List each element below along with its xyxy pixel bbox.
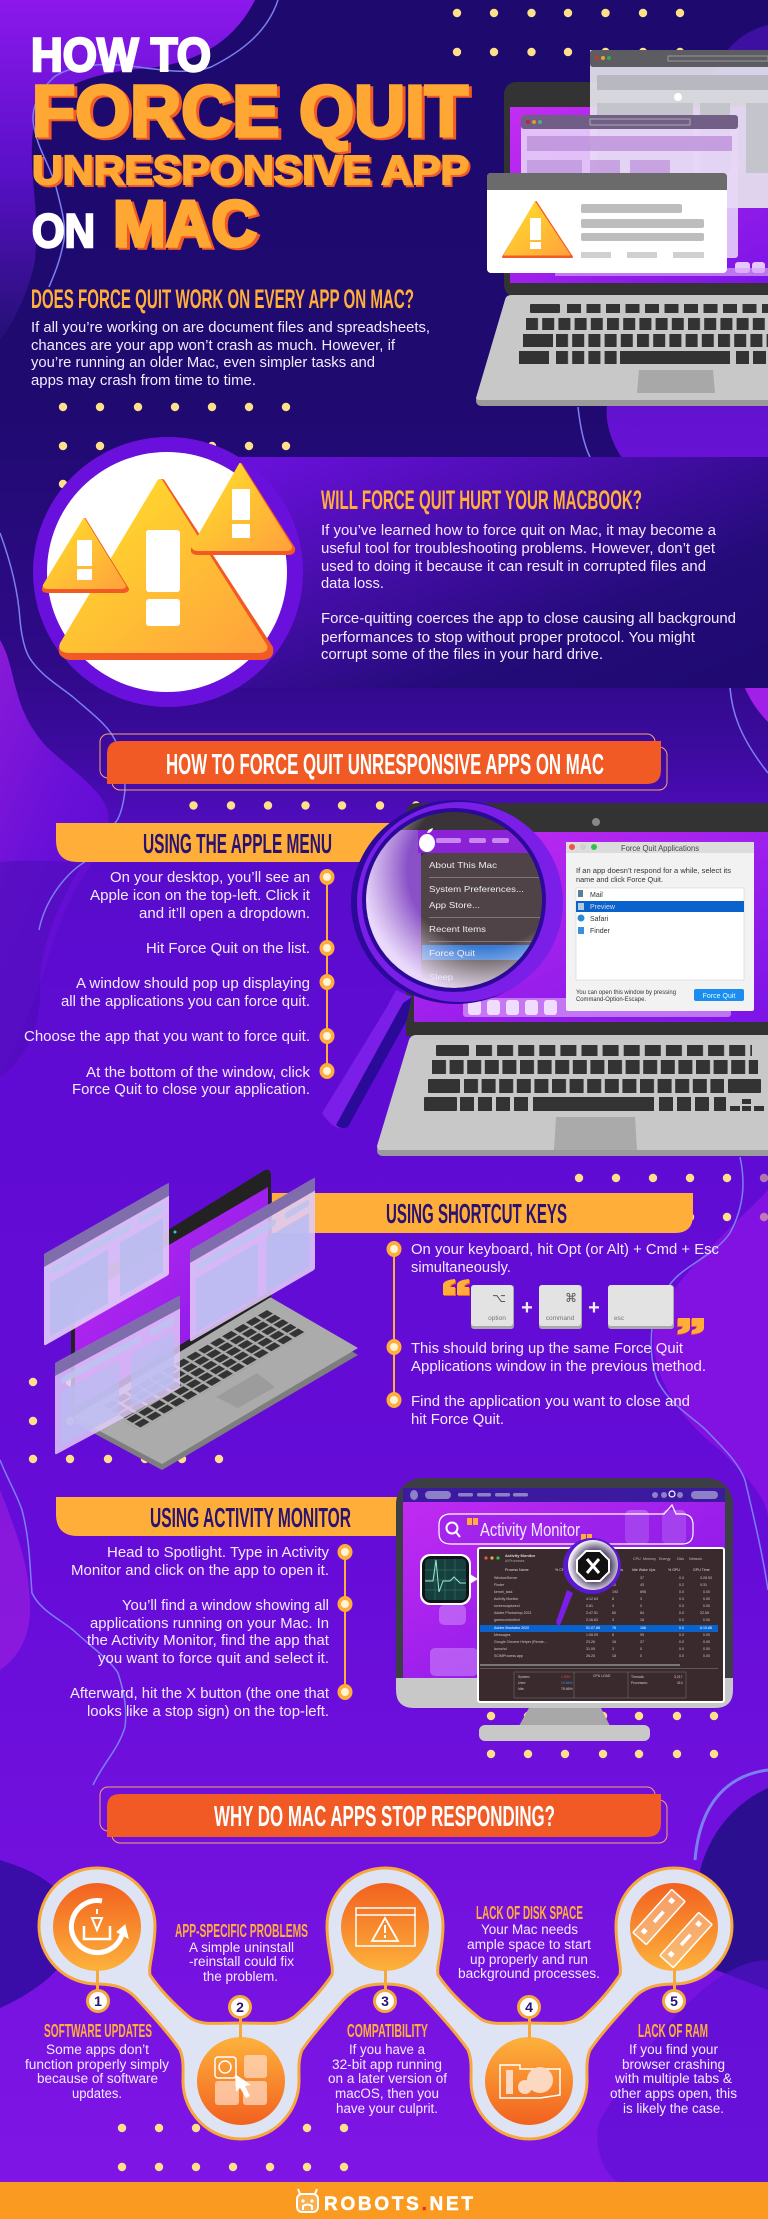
band: using activity monitor xyxy=(56,1497,400,1536)
step 4: lack of disk space: ample space to start xyxy=(467,1937,591,1952)
activity monitor window: 0.00 xyxy=(703,1654,710,1658)
activity monitor window: SCIMProcess.app xyxy=(494,1654,523,1658)
step 1: software updates: because of software xyxy=(37,2071,158,2086)
magnifier handle xyxy=(322,990,412,1128)
footer bar xyxy=(0,2182,768,2219)
activity monitor window: 6:15.88 xyxy=(700,1626,712,1630)
activity monitor window: 26.25 xyxy=(586,1654,595,1658)
activity monitor window: 1:08.05 xyxy=(586,1633,598,1637)
activity monitor window: 3 xyxy=(612,1647,614,1651)
banner: how to force quit xyxy=(100,734,667,790)
activity monitor window: Activity Monitor xyxy=(505,1553,536,1558)
intro text block: chances are your app won’t crash as much. However, if xyxy=(31,337,396,354)
activity monitor window: 0.0 xyxy=(679,1590,684,1594)
activity monitor window: CPU LOAD xyxy=(593,1674,611,1678)
key: esc: esc xyxy=(614,1315,625,1322)
panel: will force quit hurt your macbook: used to doing it because it can result in corrupted files and xyxy=(321,558,706,575)
activity monitor window: 3 xyxy=(640,1597,642,1601)
activity monitor window: 0:31 xyxy=(700,1583,707,1587)
activity monitor window: Disk xyxy=(677,1557,684,1561)
key: esc xyxy=(608,1285,674,1329)
force quit applications window: Command-Option-Escape. xyxy=(576,997,646,1003)
activity monitor window: 0.81 xyxy=(586,1604,593,1608)
activity monitor window: 0.2 xyxy=(679,1583,684,1587)
icon: magnifying glass over apple menu: Recent Items xyxy=(429,925,486,934)
icon: opening quote xyxy=(443,1279,470,1296)
floating window 1 xyxy=(44,1183,169,1346)
icon: activity monitor app xyxy=(420,1554,478,1605)
icon: search xyxy=(446,1522,460,1537)
stop sign X xyxy=(577,1551,609,1581)
activity monitor window: 1.89% xyxy=(561,1675,571,1679)
step 4: lack of disk space: 4 xyxy=(525,1999,533,2015)
steps: apple menu: At the bottom of the window, click xyxy=(86,1064,311,1081)
icon: small magnifier with stop sign xyxy=(556,1538,621,1625)
steps: apple menu: Hit Force Quit on the list. xyxy=(146,940,310,957)
activity monitor window: Memory xyxy=(643,1557,656,1561)
title: ON xyxy=(32,204,95,257)
force quit applications window: name and click Force Quit. xyxy=(576,877,663,884)
plus sign: + xyxy=(521,1297,533,1319)
illustration: desktop monitor with activity monitor xyxy=(396,1478,733,1741)
activity monitor window: 0.0 xyxy=(679,1576,684,1580)
activity monitor window: 1:55.08 xyxy=(586,1583,598,1587)
activity monitor window: 0.00 xyxy=(703,1647,710,1651)
icon: window with warning xyxy=(356,1908,415,1946)
icon: disk space card xyxy=(500,2065,560,2098)
icon: app grid with cursor xyxy=(215,2055,267,2105)
icon: closing quote xyxy=(677,1318,704,1335)
icon: robots.net logo xyxy=(297,2189,318,2212)
activity monitor window: Processes: xyxy=(631,1681,648,1685)
steps: apple menu: Choose the app that you want to force quit. xyxy=(24,1028,310,1045)
step 2: app-specific problems: APP-SPECIFIC PROBLEMS xyxy=(175,1921,308,1941)
activity monitor window: All Processes xyxy=(505,1559,525,1563)
steps: apple menu: Force Quit to close your application. xyxy=(72,1081,310,1098)
intro text block: you’re running an older Mac, even simpler tasks and xyxy=(31,354,375,371)
step 2: app-specific problems: 2 xyxy=(236,1999,244,2015)
activity monitor window: 10 xyxy=(612,1583,616,1587)
warning circle illustration xyxy=(33,437,303,707)
icon: magnifying glass over apple menu: System Preferences... xyxy=(429,885,524,894)
spotlight search box xyxy=(439,1505,693,1544)
activity monitor window: 0.0 xyxy=(679,1626,684,1630)
activity monitor window: 60 xyxy=(612,1611,616,1615)
step 3: compatibility xyxy=(328,1908,447,2116)
activity monitor window: Threads xyxy=(610,1568,623,1572)
activity monitor window: Activity Monitor xyxy=(494,1597,519,1601)
activity monitor window: 3,217 xyxy=(674,1675,683,1679)
key: command: command xyxy=(546,1315,575,1322)
icon: magnifying glass over apple menu: App Store... xyxy=(429,901,480,910)
activity monitor window: 414 xyxy=(677,1681,683,1685)
activity monitor window: 43 xyxy=(640,1583,644,1587)
step 3: compatibility: 32-bit app running xyxy=(332,2057,442,2072)
activity monitor window: System: xyxy=(518,1675,530,1679)
step 4: lack of disk space: LACK OF DISK SPACE xyxy=(476,1903,583,1923)
activity monitor window: 0.0 xyxy=(679,1647,684,1651)
key: option: option xyxy=(488,1315,506,1322)
menu bar xyxy=(410,1490,718,1500)
activity monitor window: 0.0 xyxy=(679,1654,684,1658)
activity monitor window: User: xyxy=(518,1681,526,1685)
force quit applications window: Force Quit xyxy=(703,993,735,1000)
activity monitor window: 0.00 xyxy=(703,1604,710,1608)
activity monitor window: 84 xyxy=(640,1611,644,1615)
activity monitor window: 0.00 xyxy=(703,1633,710,1637)
title: HOW TO xyxy=(31,28,211,81)
key: option: ⌥ xyxy=(492,1291,506,1305)
activity monitor window: 0.00 xyxy=(703,1597,710,1601)
panel: will force quit hurt your macbook: Force-quitting coerces the app to close causing all background xyxy=(321,610,736,627)
activity monitor window: 3 xyxy=(612,1618,614,1622)
steps: shortcut keys: simultaneously. xyxy=(411,1259,511,1276)
steps: shortcut keys: hit Force Quit. xyxy=(411,1411,504,1428)
force quit applications window: If an app doesn’t respond for a while, select its xyxy=(576,868,732,875)
step 5: lack of ram: browser crashing xyxy=(622,2057,725,2072)
intro text block: apps may crash from time to time. xyxy=(31,372,256,389)
activity monitor window: launchd xyxy=(494,1647,507,1651)
activity monitor window: 21:36:21 xyxy=(586,1590,600,1594)
icon: magnifying glass over apple menu xyxy=(322,800,563,1128)
alert window xyxy=(487,173,727,273)
activity monitor window: 0.00 xyxy=(703,1618,710,1622)
activity monitor window: 18 xyxy=(640,1618,644,1622)
activity monitor window: screencaptureui xyxy=(494,1604,520,1608)
force quit applications window: Preview xyxy=(590,904,616,911)
activity monitor window: 3 xyxy=(612,1604,614,1608)
step 1: software updates: Some apps don’t xyxy=(46,2042,149,2057)
activity monitor window: kernel_task xyxy=(494,1590,513,1594)
band: using shortcut keys: USING SHORTCUT KEYS xyxy=(386,1198,567,1229)
step 3: compatibility: If you have a xyxy=(349,2042,425,2057)
steps: shortcut keys: On your keyboard, hit Opt (or Alt) + Cmd + Esc xyxy=(411,1241,719,1258)
illustration: isometric laptop with floating windows xyxy=(44,1170,358,1470)
steps: apple menu: and it’ll open a dropdown. xyxy=(139,905,310,922)
steps: activity monitor: looks like a stop sign) on the top-left. xyxy=(87,1703,329,1720)
title: FORCE QUIT xyxy=(32,72,468,152)
activity monitor window: 22.55 xyxy=(700,1611,709,1615)
steps: activity monitor: Afterward, hit the X button (the one that xyxy=(70,1685,330,1702)
activity monitor window: Energy xyxy=(659,1557,671,1561)
activity monitor window: 37 xyxy=(640,1576,644,1580)
steps: shortcut keys xyxy=(386,1241,719,1428)
force quit applications window: Safari xyxy=(590,916,609,923)
steps: apple menu: On your desktop, you’ll see an xyxy=(110,869,310,886)
activity monitor window: 156 xyxy=(640,1626,646,1630)
activity monitor window: 0.0 xyxy=(679,1604,684,1608)
activity monitor window: 193 xyxy=(612,1590,618,1594)
step 3: compatibility: COMPATIBILITY xyxy=(347,2021,428,2041)
activity monitor window: 8 xyxy=(612,1633,614,1637)
activity monitor window: 0.0 xyxy=(679,1597,684,1601)
activity monitor window xyxy=(478,1548,724,1702)
key: command: ⌘ xyxy=(565,1291,577,1305)
band: using the apple menu xyxy=(56,823,420,862)
step 4: lack of disk space xyxy=(458,1903,600,2098)
steps: activity monitor: Monitor and click on the app to open it. xyxy=(71,1562,329,1579)
spotlight search box: Activity Monitor xyxy=(480,1520,580,1540)
laptop base and keyboard xyxy=(377,1035,768,1156)
step 1: software updates: updates. xyxy=(72,2086,122,2101)
step 2: app-specific problems xyxy=(175,1921,308,2105)
icon: ram sticks xyxy=(633,1889,712,1968)
activity monitor window: GPU Time xyxy=(693,1568,710,1572)
activity monitor window: Messages xyxy=(494,1633,511,1637)
panel: will force quit hurt your macbook: corrupt some of the files in your hard drive. xyxy=(321,646,603,663)
activity monitor window: 20.26.55 xyxy=(586,1576,600,1580)
keyboard key combo xyxy=(443,1279,704,1335)
step 3: compatibility: on a later version of xyxy=(328,2071,447,2086)
activity monitor window: 0.0 xyxy=(679,1611,684,1615)
activity monitor window: gamecontrollerd xyxy=(494,1618,520,1622)
activity monitor window: 4:12.63 xyxy=(586,1597,598,1601)
activity monitor window: 2:47.51 xyxy=(586,1611,598,1615)
activity monitor window: 37 xyxy=(640,1640,644,1644)
step 1: software updates: 1 xyxy=(94,1993,102,2009)
key: option xyxy=(471,1285,514,1329)
illustration: laptop with alert windows xyxy=(476,50,768,406)
activity monitor window: 0.0 xyxy=(679,1640,684,1644)
force quit applications window: You can open this window by pressing xyxy=(576,990,676,996)
small left warning triangle xyxy=(43,519,128,592)
icon: apple logo xyxy=(419,828,435,852)
activity monitor window: 0 xyxy=(640,1604,642,1608)
activity monitor window: % CPU xyxy=(555,1568,567,1572)
activity monitor window: 2:16.63 xyxy=(586,1618,598,1622)
step 5: lack of ram: 5 xyxy=(670,1993,678,2009)
floating window 2 xyxy=(190,1178,315,1342)
activity monitor window: 0.00 xyxy=(703,1640,710,1644)
activity monitor window: Adobe Illustrator 2020 xyxy=(494,1626,529,1630)
panel: will force quit hurt your macbook: useful tool for troubleshooting problems. However, don’t get xyxy=(321,540,716,557)
band: using shortcut keys xyxy=(272,1193,693,1233)
steps: activity monitor: You’ll find a window showing all xyxy=(122,1597,329,1614)
step 4: lack of disk space: background processes. xyxy=(458,1966,600,1981)
steps: activity monitor: the Activity Monitor, find the app that xyxy=(87,1632,330,1649)
band: using the apple menu: USING THE APPLE MENU xyxy=(143,828,332,859)
step 5: lack of ram xyxy=(610,1889,737,2116)
small right warning triangle xyxy=(192,464,294,554)
activity monitor window: 3:28.53 xyxy=(700,1576,712,1580)
steps: shortcut keys: Find the application you want to close and xyxy=(411,1393,690,1410)
steps: activity monitor: applications running on your Mac. In xyxy=(90,1615,329,1632)
step 3: compatibility: 3 xyxy=(381,1993,389,2009)
step 4: lack of disk space: Your Mac needs xyxy=(481,1922,578,1937)
activity monitor window: 51:07.88 xyxy=(586,1626,600,1630)
title: UNRESPONSIVE APP xyxy=(32,147,469,193)
activity monitor window: Threads: xyxy=(631,1675,644,1679)
activity monitor window: 0.00 xyxy=(703,1590,710,1594)
band: using activity monitor: USING ACTIVITY MONITOR xyxy=(150,1502,351,1533)
plus sign: + xyxy=(588,1297,600,1319)
steps: apple menu xyxy=(24,869,334,1098)
activity monitor window: CPU xyxy=(633,1557,641,1561)
activity monitor window: 95 xyxy=(640,1633,644,1637)
activity monitor window: WindowServer xyxy=(494,1576,518,1580)
heading: does force quit work: DOES FORCE QUIT WORK ON EVERY APP ON MAC? xyxy=(31,284,414,314)
activity monitor window: 10.66% xyxy=(561,1681,572,1685)
warning triangle xyxy=(503,202,572,257)
panel: will force quit hurt your macbook: If you’ve learned how to force quit on Mac, it may become a xyxy=(321,522,717,539)
laptop base and keyboard xyxy=(476,295,768,406)
title: MAC xyxy=(113,187,257,260)
activity monitor window: % GPU xyxy=(668,1568,680,1572)
floating window 3 xyxy=(55,1296,180,1455)
activity monitor window: Finder xyxy=(494,1583,505,1587)
step 5: lack of ram: other apps open, this xyxy=(610,2086,737,2101)
steps: activity monitor: you want to force quit and select it. xyxy=(98,1650,329,1667)
icon: magnifying glass over apple menu: Sleep xyxy=(429,973,454,982)
activity monitor window: 31.09 xyxy=(586,1647,595,1651)
activity monitor window: 0 xyxy=(640,1647,642,1651)
icon: software update xyxy=(71,1901,128,1953)
step 2: app-specific problems: the problem. xyxy=(203,1969,278,1984)
activity monitor window: 8 xyxy=(612,1597,614,1601)
force quit applications window: Mail xyxy=(590,892,603,899)
activity monitor window: Network xyxy=(689,1557,702,1561)
activity monitor window: Idle Wake Ups xyxy=(632,1568,655,1572)
activity monitor window: 76 xyxy=(612,1626,616,1630)
intro text block: If all you’re working on are document files and spreadsheets, xyxy=(31,319,430,336)
intro text block xyxy=(31,284,430,389)
activity monitor window: 78.66% xyxy=(561,1687,572,1691)
panel: will force quit hurt your macbook: performances to stop without proper protocol. You might xyxy=(321,629,696,646)
step 5: lack of ram: LACK OF RAM xyxy=(638,2021,708,2041)
icon: magnifying glass over apple menu: Force Quit xyxy=(429,949,476,958)
steps: apple menu: all the applications you can force quit. xyxy=(61,993,310,1010)
monitor stand xyxy=(479,1706,650,1741)
panel: will force quit hurt your macbook xyxy=(33,437,768,707)
activity monitor window: 18 xyxy=(612,1654,616,1658)
wave connector with circles xyxy=(39,1868,732,2139)
activity monitor window: 0.0 xyxy=(679,1633,684,1637)
step 3: compatibility: macOS, then you xyxy=(335,2086,439,2101)
force quit applications window xyxy=(566,842,754,1011)
step 2: app-specific problems: A simple uninstall xyxy=(189,1940,294,1955)
step 2: app-specific problems: -reinstall could fix xyxy=(189,1954,294,1969)
step 5: lack of ram: is likely the case. xyxy=(623,2101,724,2116)
activity monitor window: 0.0 xyxy=(679,1618,684,1622)
illustration: laptop with force quit window xyxy=(377,803,768,1156)
steps: activity monitor xyxy=(70,1544,352,1720)
key: command xyxy=(539,1285,582,1329)
step 1: software updates xyxy=(25,1901,169,2101)
large warning triangle xyxy=(62,482,270,657)
panel: will force quit hurt your macbook: data loss. xyxy=(321,575,384,592)
banner: why do mac apps stop responding xyxy=(100,1787,667,1843)
steps: shortcut keys: Applications window in the previous method. xyxy=(411,1358,706,1375)
step 5: lack of ram: If you find your xyxy=(629,2042,718,2057)
step 5: lack of ram: with multiple tabs & xyxy=(614,2071,732,2086)
step 4: lack of disk space: up properly and run xyxy=(470,1952,588,1967)
steps: apple menu: A window should pop up displaying xyxy=(76,975,310,992)
step 1: software updates: SOFTWARE UPDATES xyxy=(44,2021,152,2041)
activity monitor window: 13 xyxy=(612,1576,616,1580)
activity monitor window: Process Name xyxy=(505,1568,529,1572)
step 1: software updates: function properly simply xyxy=(25,2057,169,2072)
steps: activity monitor: Head to Spotlight. Type in Activity xyxy=(107,1544,329,1561)
activity monitor window: 695 xyxy=(640,1590,646,1594)
footer bar: ROBOTS.NET xyxy=(324,2194,473,2215)
activity monitor window: 23.26 xyxy=(586,1640,595,1644)
force quit applications window: Finder xyxy=(590,928,611,935)
steps: apple menu: Apple icon on the top-left. Click it xyxy=(90,887,311,904)
activity monitor window: Google Chrome Helper (Rende... xyxy=(494,1640,547,1644)
activity monitor window: 0 xyxy=(640,1654,642,1658)
title xyxy=(31,28,469,260)
faint dock and app icons xyxy=(430,1510,686,1676)
activity monitor window: Idle: xyxy=(518,1687,524,1691)
activity monitor window: Adobe Photoshop 2021 xyxy=(494,1611,532,1615)
step 3: compatibility: have your culprit. xyxy=(336,2101,438,2116)
activity monitor window: 16 xyxy=(612,1640,616,1644)
force quit applications window: Force Quit Applications xyxy=(621,843,699,853)
icon: magnifying glass over apple menu: About This Mac xyxy=(429,861,497,870)
steps: shortcut keys: This should bring up the same Force Quit xyxy=(411,1340,684,1357)
